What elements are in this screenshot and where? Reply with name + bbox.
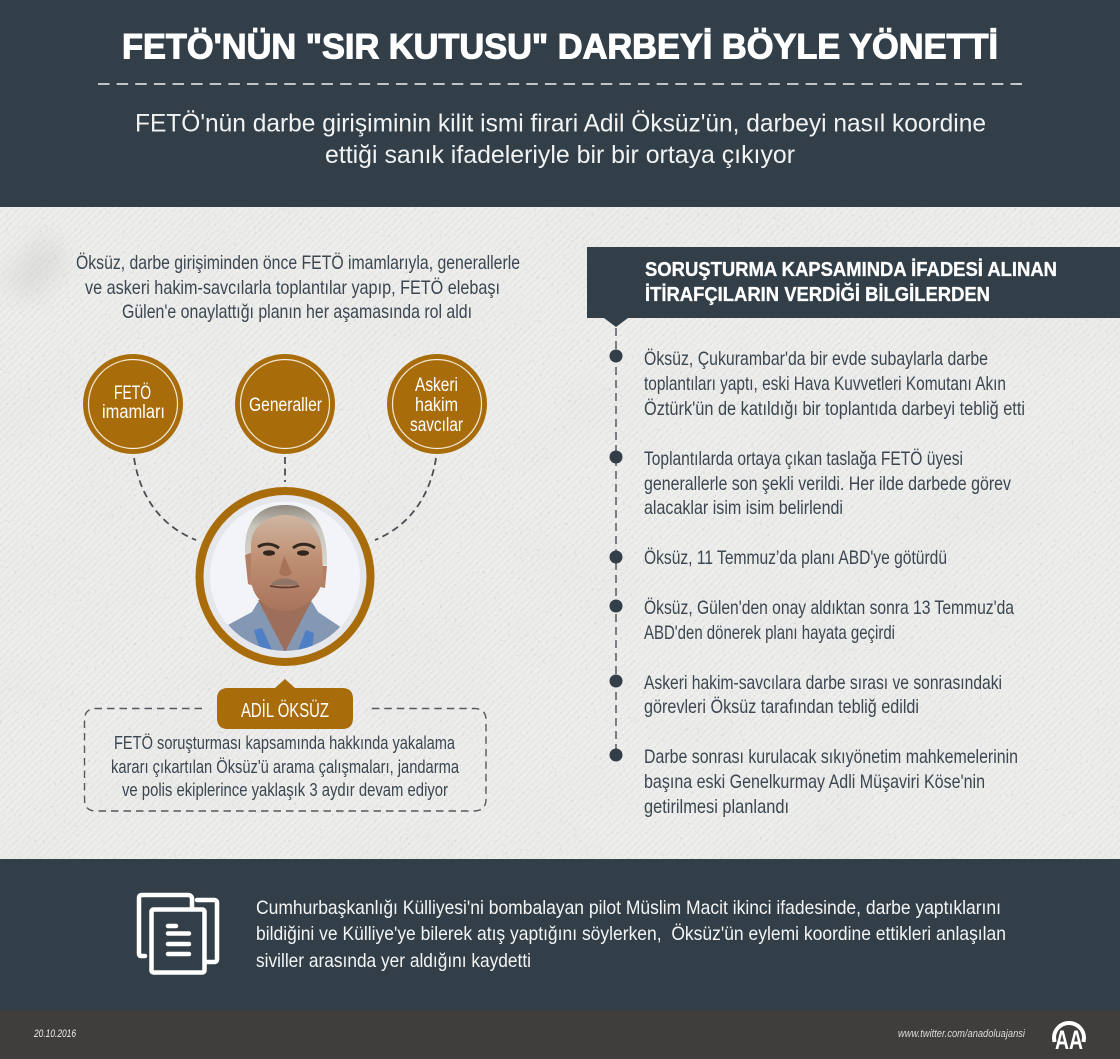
list item 5: görevleri Öksüz tarafından tebliğ edildi	[644, 696, 919, 718]
panel heading: testimony: İTİRAFÇILARIN VERDİĞİ BİLGİLERDEN	[645, 282, 990, 306]
list item 6: Darbe sonrası kurulacak sıkıyönetim mahkemelerinin	[644, 746, 1018, 768]
list item 2: alacaklar isim isim belirlendi	[644, 497, 843, 519]
list item 1: Öksüz, Çukurambar'da bir evde subaylarla darbe	[644, 348, 988, 370]
circle: Generaller: Generaller	[249, 395, 323, 416]
panel: header	[0, 0, 1120, 207]
circle: FETÖ imamları: FETÖ	[114, 383, 151, 404]
name label: ADİL ÖKSÜZ	[217, 679, 353, 729]
circle: Askeri hakim savcılar: Askeri	[415, 375, 458, 396]
list item 5: Askeri hakim-savcılara darbe sırası ve sonrasındaki	[644, 672, 1002, 694]
list item 6: getirilmesi planlandı	[644, 796, 789, 818]
title: FETÖ'NÜN "SIR KUTUSU" DARBEYİ BÖYLE YÖNETTİ	[122, 28, 998, 66]
callout: dashed info box	[84, 708, 486, 811]
list item 6	[644, 746, 1018, 818]
list item 3: Öksüz, 11 Temmuz’da planı ABD'ye götürdü	[644, 547, 947, 569]
list item 2: Toplantılarda ortaya çıkan taslağa FETÖ üyesi	[644, 448, 963, 470]
name label: ADİL ÖKSÜZ: ADİL ÖKSÜZ	[241, 699, 329, 722]
panel: footer	[0, 1010, 1120, 1059]
connector: dashed arrows to centre portrait	[134, 457, 436, 540]
circle: Askeri hakim savcılar: hakim	[415, 395, 458, 416]
panel: textured background	[0, 207, 1120, 859]
circle: Generaller	[235, 354, 335, 454]
list item 4: Öksüz, Gülen'den onay aldıktan sonra 13 Temmuz'da	[644, 597, 1014, 619]
list item 4: ABD'den dönerek planı hayata geçirdi	[644, 622, 895, 644]
intro text block: ve askeri hakim-savcılarla toplantılar yapıp, FETÖ elebaşı	[85, 277, 500, 299]
circle: FETÖ imamları: imamları	[102, 402, 165, 423]
subtitle: FETÖ'nün darbe girişiminin kilit ismi firari Adil Öksüz'ün, darbeyi nasıl koordine	[135, 110, 986, 138]
icon: AA logo: AA	[1055, 1025, 1083, 1055]
icon: AA logo	[1054, 1023, 1084, 1055]
panel heading: testimony	[587, 247, 1120, 327]
circle: Askeri hakim savcılar: savcılar	[410, 415, 464, 436]
note text	[256, 897, 1006, 972]
circle: FETÖ imamları	[83, 354, 183, 454]
list item 2	[644, 448, 1011, 519]
list item 1	[644, 348, 1025, 420]
note text: siviller arasında yer aldığını kaydetti	[256, 950, 531, 972]
list item 5	[644, 672, 1002, 718]
callout: dashed info box: kararı çıkartılan Öksüz'ü arama çalışmaları, jandarma	[111, 756, 460, 777]
panel: bottom note	[0, 859, 1120, 1010]
intro text block: Gülen'e onaylattığı planın her aşamasında rol aldı	[122, 301, 472, 323]
timeline: dashed line and dots	[610, 328, 622, 762]
callout: dashed info box: ve polis ekiplerince yaklaşık 3 aydır devam ediyor	[122, 779, 448, 800]
portrait: Adil Öksüz	[196, 487, 374, 666]
note text: bildiğini ve Külliye'ye bilerek atış yaptığını söylerken, Öksüz'ün eylemi koordine ettikleri anlaşılan	[256, 923, 1006, 945]
note text: Cumhurbaşkanlığı Külliyesi'ni bombalayan pilot Müslim Macit ikinci ifadesinde, darbe yaptıklarını	[256, 897, 1001, 919]
subtitle: ettiği sanık ifadeleriyle bir bir ortaya çıkıyor	[325, 141, 795, 169]
list item 6: başına eski Genelkurmay Adli Müşaviri Köse'nin	[644, 771, 985, 793]
intro text block: Öksüz, darbe girişiminden önce FETÖ imamlarıyla, generallerle	[76, 252, 520, 274]
intro text block	[76, 252, 520, 323]
list item 1: toplantıları yaptı, eski Hava Kuvvetleri Komutanı Akın	[644, 373, 1006, 395]
date: 20.10.2016	[33, 1028, 77, 1040]
subtitle	[135, 110, 986, 169]
source url: www.twitter.com/anadoluajansi	[898, 1028, 1025, 1040]
list item 4	[644, 597, 1014, 644]
circle: Askeri hakim savcılar	[387, 354, 487, 454]
panel heading: testimony: SORUŞTURMA KAPSAMINDA İFADESİ ALINAN	[645, 258, 1057, 281]
icon: documents	[139, 895, 217, 972]
list item 1: Öztürk'ün de katıldığı bir toplantıda darbeyi tebliğ etti	[644, 398, 1025, 420]
list item 2: generallerle son şekli verildi. Her ilde darbede görev	[644, 473, 1011, 495]
callout: dashed info box: FETÖ soruşturması kapsamında hakkında yakalama	[114, 732, 456, 753]
